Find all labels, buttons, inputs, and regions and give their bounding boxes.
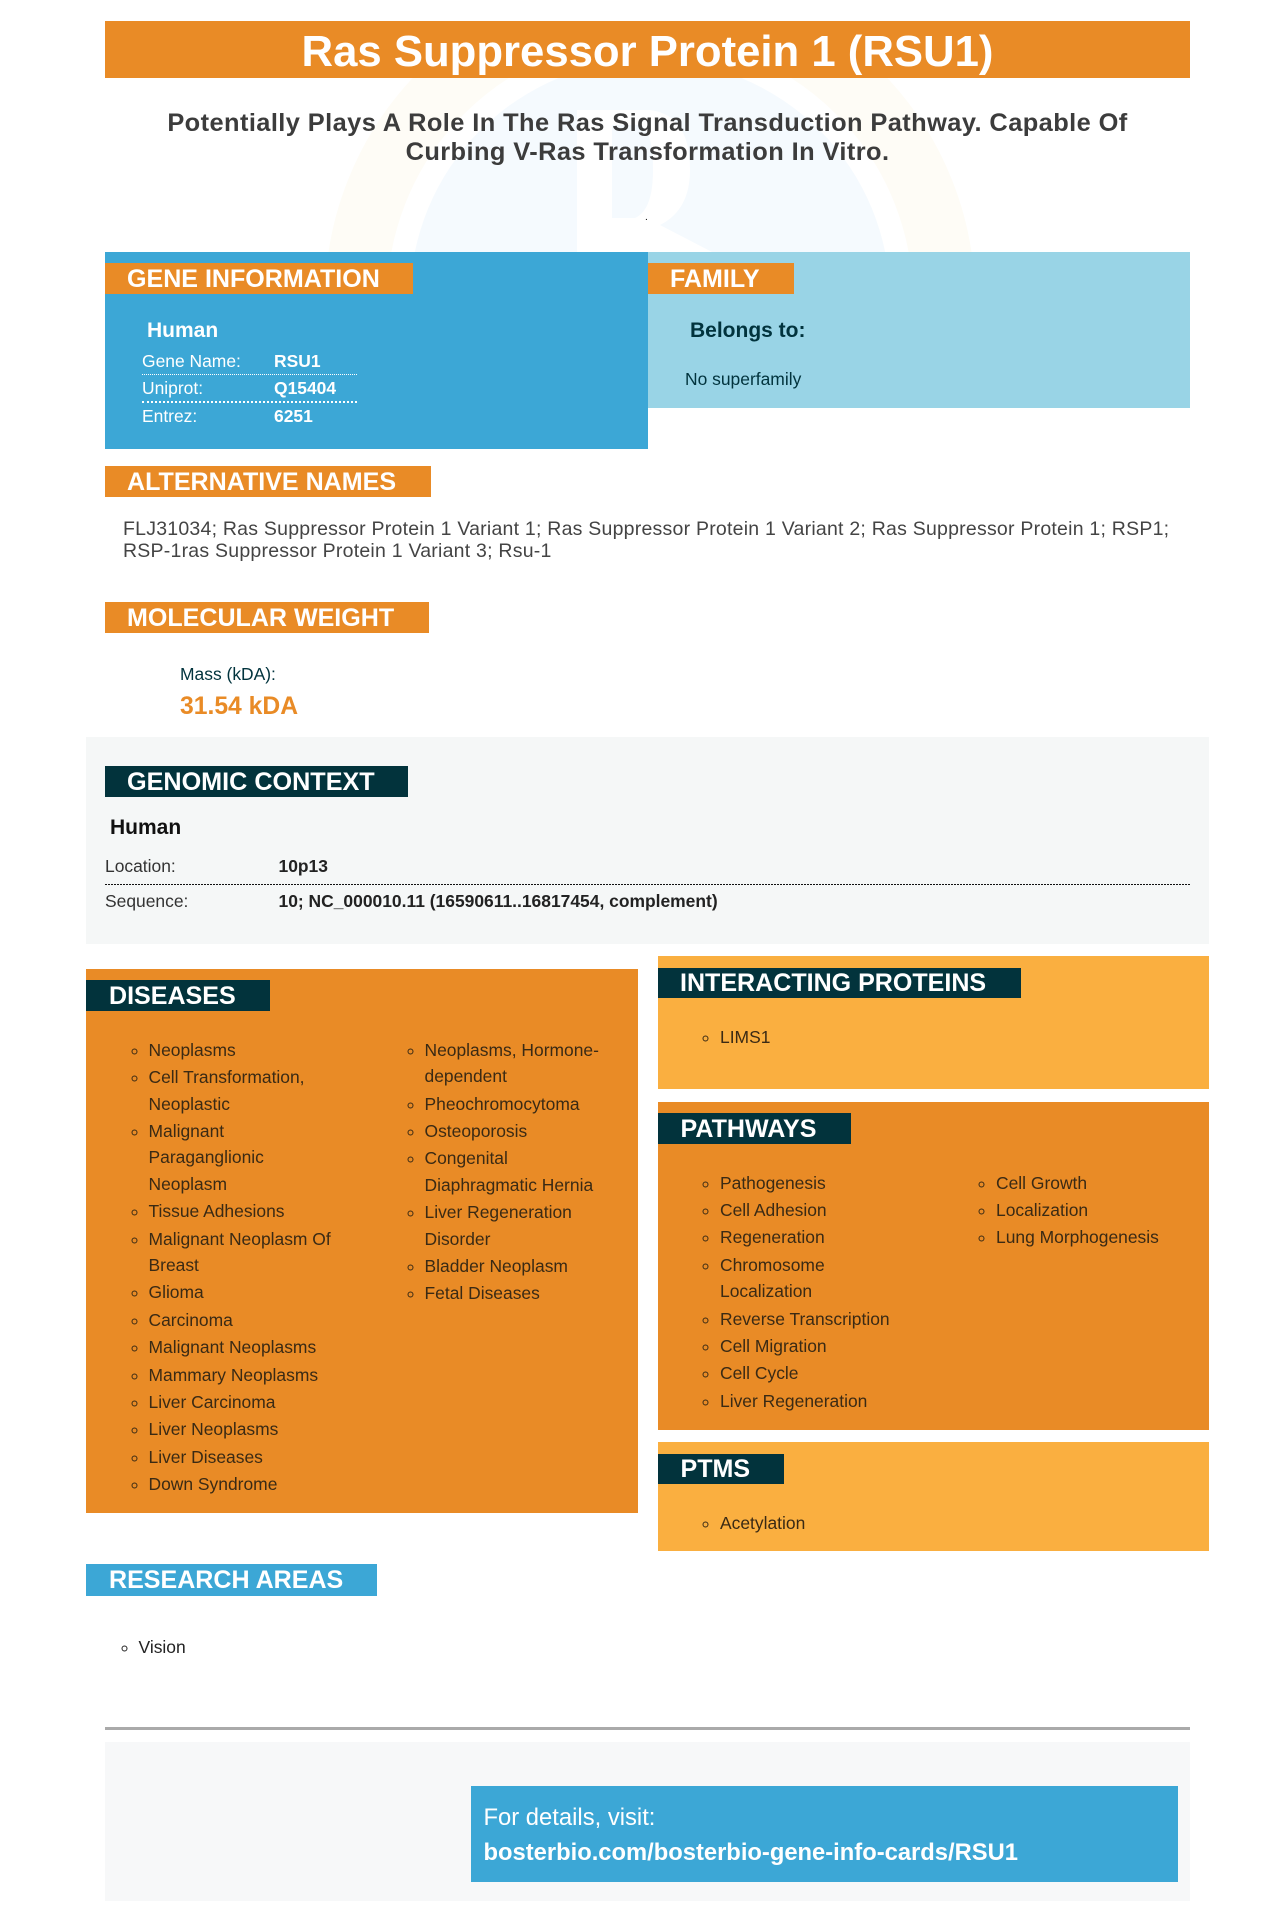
PTMs list: Acetylation <box>720 1513 805 1533</box>
subtitle <box>167 108 1128 166</box>
disease list column 1: Mammary Neoplasms <box>148 1365 318 1385</box>
disease list column 2: Congenital <box>424 1148 508 1168</box>
pathways list column 1 <box>702 1173 890 1411</box>
sequence row: 10; NC_000010.11 (16590611..16817454, complement) <box>278 891 718 911</box>
entrez row: Entrez: <box>142 406 197 426</box>
disease list column 1: Neoplasms <box>148 1040 236 1060</box>
callout url: bosterbio.com/bosterbio-gene-info-cards/RSU1 <box>484 1839 1018 1866</box>
callout: details link <box>471 1786 1178 1882</box>
disease list column 1: Neoplastic <box>148 1094 230 1114</box>
pathways list column 2: Cell Growth <box>996 1173 1087 1193</box>
disease list column 1: Liver Carcinoma <box>148 1392 275 1412</box>
callout label: For details, visit: <box>484 1804 655 1831</box>
heading: research areas: RESEARCH AREAS <box>109 1566 343 1594</box>
disease list column 2: Osteoporosis <box>424 1121 527 1141</box>
heading: diseases: DISEASES <box>109 982 236 1010</box>
pathways list column 1: Localization <box>720 1281 812 1301</box>
pathways list column 2: Localization <box>996 1200 1088 1220</box>
heading: diseases <box>86 980 270 1011</box>
disease list column 2: Fetal Diseases <box>424 1283 540 1303</box>
gene name row <box>142 348 357 375</box>
pathways list column 1: Chromosome <box>720 1255 825 1275</box>
entrez row: 6251 <box>274 406 313 426</box>
panel: genomic context <box>86 737 1209 944</box>
disease list column 1: Paraganglionic <box>148 1147 264 1167</box>
pathways list column 1: Liver Regeneration <box>720 1391 867 1411</box>
alternative names text: RSP-1ras Suppressor Protein 1 Variant 3; Rsu-1 <box>123 540 552 562</box>
heading: family <box>648 263 794 294</box>
heading: family: FAMILY <box>670 265 760 293</box>
pathways list column 1: Cell Cycle <box>720 1363 798 1383</box>
panel: pathways <box>658 1102 1209 1430</box>
pathways list column 1: Cell Migration <box>720 1336 827 1356</box>
disease list column 2: Pheochromocytoma <box>424 1094 580 1114</box>
pathways list column 1: Cell Adhesion <box>720 1200 827 1220</box>
heading: PTMs: PTMS <box>680 1455 750 1483</box>
no superfamily: No superfamily <box>685 369 801 389</box>
panel: PTMs <box>658 1442 1209 1551</box>
gene name row: Gene Name: <box>142 351 241 371</box>
footer rule <box>105 1727 1190 1730</box>
interacting proteins list: LIMS1 <box>720 1027 770 1047</box>
disease list column 2: Bladder Neoplasm <box>424 1256 568 1276</box>
disease list column 1: Breast <box>148 1255 199 1275</box>
heading: gene information: GENE INFORMATION <box>127 265 380 293</box>
disease list column 1: Malignant Neoplasm Of <box>148 1229 331 1249</box>
uniprot row: Uniprot: <box>142 378 203 398</box>
dotted divider <box>105 884 1190 885</box>
disease list column 2: Diaphragmatic Hernia <box>424 1175 593 1195</box>
heading: interacting proteins: INTERACTING PROTEINS <box>680 969 986 997</box>
alternative names text: FLJ31034; Ras Suppressor Protein 1 Variant 1; Ras Suppressor Protein 1 Variant 2; Ras Suppressor Protein 1; RSP1; <box>123 518 1169 540</box>
title banner: Ras Suppressor Protein 1 (RSU1) <box>302 27 993 76</box>
watermark logo <box>329 78 971 252</box>
heading: alternative names: ALTERNATIVE NAMES <box>127 468 396 496</box>
location row: Location: <box>105 856 176 876</box>
species label: Human <box>147 319 218 342</box>
disease list column 1: Glioma <box>148 1282 204 1302</box>
panel: family <box>648 252 1190 408</box>
pathways list column 1: Regeneration <box>720 1227 825 1247</box>
pathways list column 1: Pathogenesis <box>720 1173 826 1193</box>
uniprot row: Q15404 <box>274 378 336 398</box>
disease list column 1 <box>132 1040 331 1494</box>
disease list column 1: Malignant <box>148 1121 224 1141</box>
panel: gene information <box>105 252 648 449</box>
disease list column 1: Malignant Neoplasms <box>148 1337 316 1357</box>
alternative names text <box>123 518 1169 562</box>
disease list column 1: Liver Diseases <box>148 1447 263 1467</box>
subtitle: Potentially Plays A Role In The Ras Signal Transduction Pathway. Capable Of <box>167 108 1128 136</box>
panel: interacting proteins <box>658 956 1209 1089</box>
entrez row <box>142 406 313 426</box>
gene name row: RSU1 <box>274 351 321 371</box>
panel: footer <box>105 1742 1190 1901</box>
heading: pathways <box>658 1113 851 1144</box>
disease list column 1: Tissue Adhesions <box>148 1201 285 1221</box>
research areas list: Vision <box>138 1637 186 1657</box>
pathways list column 2: Lung Morphogenesis <box>996 1227 1159 1247</box>
location row: 10p13 <box>278 856 328 876</box>
pathways list column 2 <box>978 1173 1159 1247</box>
mass value: 31.54 kDA <box>180 693 298 720</box>
disease list column 1: Neoplasm <box>148 1174 227 1194</box>
subtitle: Curbing V-Ras Transformation In Vitro. <box>406 138 889 166</box>
sequence row: Sequence: <box>105 891 188 911</box>
disease list column 1: Carcinoma <box>148 1310 233 1330</box>
disease list column 2: Disorder <box>424 1229 490 1249</box>
species label: Human <box>110 816 181 839</box>
separator dot: . <box>645 212 648 223</box>
belongs to: Belongs to: <box>690 319 806 342</box>
location row <box>105 856 328 876</box>
disease list column 1: Cell Transformation, <box>148 1067 305 1087</box>
uniprot row <box>142 375 357 403</box>
mass label: Mass (kDA): <box>180 664 276 684</box>
disease list column 2: Neoplasms, Hormone- <box>424 1040 599 1060</box>
pathways list column 1: Reverse Transcription <box>720 1309 890 1329</box>
heading: molecular weight: MOLECULAR WEIGHT <box>127 604 394 632</box>
disease list column 2: dependent <box>424 1066 507 1086</box>
title banner <box>105 21 1190 78</box>
heading: genomic context: GENOMIC CONTEXT <box>127 768 375 796</box>
heading: PTMs <box>658 1454 784 1484</box>
disease list column 2: Liver Regeneration <box>424 1202 572 1222</box>
disease list column 1: Liver Neoplasms <box>148 1419 278 1439</box>
disease list column 1: Down Syndrome <box>148 1474 277 1494</box>
heading: pathways: PATHWAYS <box>680 1115 816 1143</box>
panel: diseases <box>86 969 638 1513</box>
disease list column 2 <box>408 1040 599 1303</box>
